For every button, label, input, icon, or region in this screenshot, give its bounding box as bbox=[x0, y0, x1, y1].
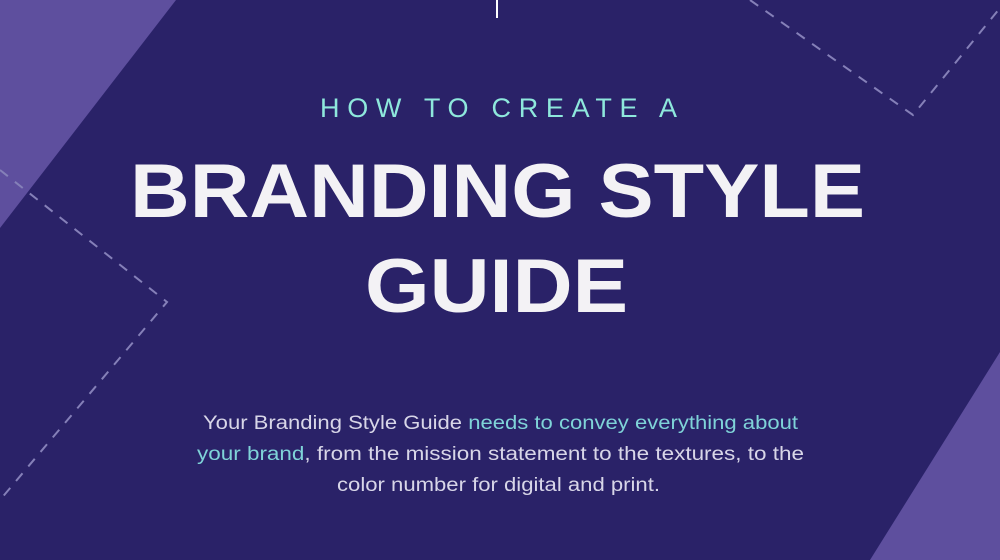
dashed chevron top right bbox=[750, 0, 1000, 115]
intro paragraph bbox=[197, 413, 804, 496]
dashed chevron left bbox=[0, 170, 167, 500]
intro paragraph: Your Branding Style Guide needs to convey everything about bbox=[203, 413, 799, 434]
subtitle: HOW TO CREATE A bbox=[320, 93, 677, 123]
intro paragraph: your brand , from the mission statement to the textures, to the bbox=[197, 444, 804, 465]
decorative triangle: bottom right bbox=[870, 352, 1000, 560]
intro paragraph: color number for digital and print. bbox=[337, 475, 660, 496]
decorative triangle: top left bbox=[0, 0, 176, 228]
top connector line bbox=[496, 0, 498, 18]
title line 2: GUIDE bbox=[365, 244, 628, 329]
title line 1: BRANDING STYLE bbox=[130, 149, 865, 234]
